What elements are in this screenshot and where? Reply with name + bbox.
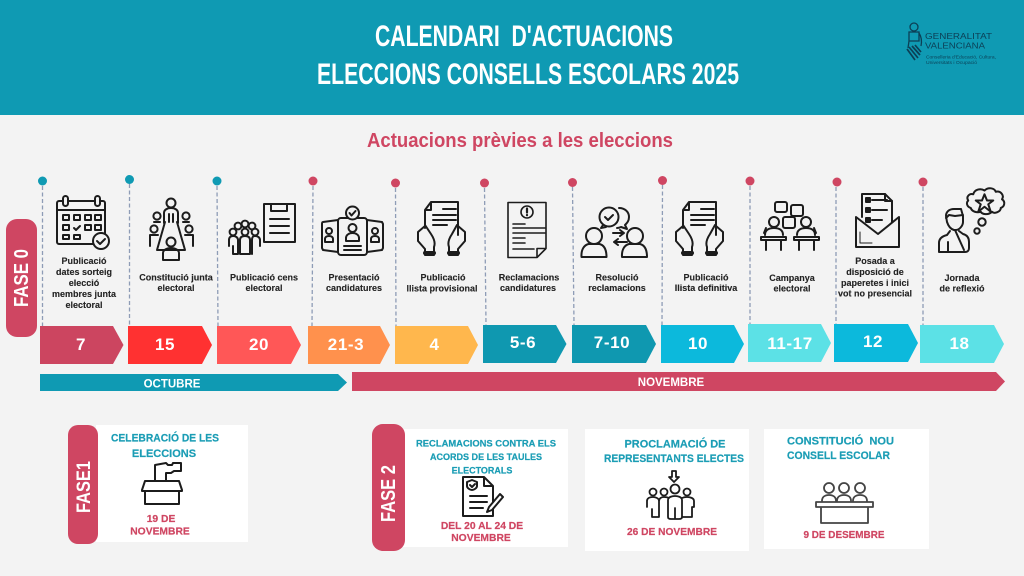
tab: FASE 0: FASE 0 xyxy=(11,249,33,307)
date arrow: 4: 4 xyxy=(429,335,440,354)
panel: Constitució nou consell xyxy=(764,429,929,549)
label: Resolució: reclamacions xyxy=(588,283,646,293)
label: Resolució: Resolució xyxy=(595,272,639,282)
panel: Proclamació: PROCLAMACIÓ DE xyxy=(624,438,726,450)
date arrow: 10 xyxy=(661,325,744,363)
panel: FASE 2 xyxy=(372,424,568,551)
panel: FASE 2: RECLAMACIONS CONTRA ELS xyxy=(416,438,556,450)
date arrow: 20 xyxy=(217,326,301,364)
label: Publicació cens: Publicació cens xyxy=(230,272,298,282)
date arrow: 5-6 xyxy=(483,325,566,363)
date arrow: 7-10: 7-10 xyxy=(594,333,630,352)
label: Jornada: Jornada xyxy=(944,273,980,283)
icon: candidate cards xyxy=(322,206,383,255)
panel: FASE 1: NOVEMBRE xyxy=(130,526,190,538)
date arrow: 12: 12 xyxy=(863,332,883,351)
icon: final list held in hands xyxy=(676,202,723,255)
title: CALENDARI D'ACTUACIONS xyxy=(375,20,673,53)
month bar: OCTUBRE xyxy=(40,374,347,391)
tab: FASE 0 xyxy=(6,219,37,337)
icon: provisional list held in hands xyxy=(418,202,465,255)
panel: FASE 2: ELECTORALS xyxy=(452,466,512,476)
label: llista definitiva: Publicació xyxy=(683,272,729,282)
label: Publicació dates: elecció xyxy=(69,278,100,288)
label: Publicació dates: electoral xyxy=(65,300,103,310)
icon: claims document with alert xyxy=(508,202,546,258)
icon: council table xyxy=(816,483,873,523)
label: Publicació dates: Publicació xyxy=(61,256,107,266)
icon: calendar xyxy=(57,196,109,249)
icon: electoral board meeting xyxy=(150,198,193,260)
panel: FASE 2: DEL 20 AL 24 DE xyxy=(441,521,523,532)
month bar: NOVEMBRE xyxy=(352,372,1005,391)
label: Constitució junta: electoral xyxy=(157,283,195,293)
date arrow: 11-17 xyxy=(748,324,831,362)
title: ELECCIONS CONSELLS ESCOLARS 2025 xyxy=(317,58,739,91)
title xyxy=(317,20,739,91)
logo: Generalitat Valenciana xyxy=(907,23,996,65)
label: llista provisional: llista provisional xyxy=(406,284,478,294)
date arrow: 11-17: 11-17 xyxy=(767,334,813,353)
label: Publicació dates: membres junta xyxy=(52,289,117,299)
date arrow: 15 xyxy=(128,326,212,364)
icon: electoral campaign xyxy=(761,202,819,250)
label: Posada a disposició: vot no presencial xyxy=(838,288,912,298)
logo: Generalitat Valenciana: Universitats i Ocupació xyxy=(926,60,978,65)
logo: Generalitat Valenciana: Conselleria d'Educació, Cultura, xyxy=(926,54,996,60)
date arrow: 5-6: 5-6 xyxy=(510,333,536,352)
label: llista provisional: Publicació xyxy=(420,272,466,282)
month bar: OCTUBRE: OCTUBRE xyxy=(144,378,201,390)
logo: Generalitat Valenciana: VALENCIANA xyxy=(925,40,985,50)
label: Campanya: Campanya xyxy=(769,273,816,283)
label: Campanya: electoral xyxy=(773,284,811,294)
label: Jornada: de reflexió xyxy=(939,284,985,294)
panel: Constitució nou consell: CONSTITUCIÓ NOU xyxy=(787,434,894,448)
panel: Constitució nou consell: CONSELL ESCOLAR xyxy=(787,450,890,462)
heading: prior actions: Actuacions prèvies a les eleccions xyxy=(367,130,673,152)
label: Constitució junta: Constitució junta xyxy=(139,272,214,282)
icon: people with arrow xyxy=(647,471,694,519)
label: Publicació dates: dates sorteig xyxy=(56,267,112,277)
icon: ballot papers in envelope xyxy=(856,194,899,247)
label: Reclamacions: Reclamacions xyxy=(499,272,559,282)
label: Reclamacions: candidatures xyxy=(500,283,556,293)
month bar: NOVEMBRE: NOVEMBRE xyxy=(638,377,705,389)
date arrow: 12 xyxy=(834,324,918,362)
date arrow: 18: 18 xyxy=(949,334,970,353)
date arrow: 7-10 xyxy=(572,325,656,363)
label: Publicació cens: electoral xyxy=(245,283,283,293)
panel: FASE 2: FASE 2 xyxy=(378,465,400,522)
date arrow: 4 xyxy=(395,326,478,364)
panel: FASE 1 xyxy=(68,425,248,544)
icon: census list and people xyxy=(229,204,295,254)
date arrow: 21-3 xyxy=(308,326,390,364)
panel: FASE 2: NOVEMBRE xyxy=(451,533,511,544)
date arrow: 15: 15 xyxy=(155,335,175,354)
icon: document with pen xyxy=(463,477,503,516)
panel: FASE 1: ELECCIONS xyxy=(132,448,196,460)
header band xyxy=(0,0,1024,115)
label: Posada a disposició: disposició de xyxy=(846,267,904,277)
label: Posada a disposició: paperetes i inici xyxy=(841,278,909,288)
date arrow: 18 xyxy=(920,325,1004,363)
timeline pins xyxy=(38,175,928,326)
panel: FASE 1: 19 DE xyxy=(147,514,175,525)
date arrow: 21-3: 21-3 xyxy=(328,335,364,354)
panel: Constitució nou consell: 9 DE DESEMBRE xyxy=(804,529,884,541)
label: Posada a disposició: Posada a xyxy=(855,256,896,266)
date arrow: 7: 7 xyxy=(76,335,86,354)
label: Presentació: candidatures xyxy=(326,283,382,293)
icon: resolution of claims xyxy=(581,208,647,257)
date arrow: 20: 20 xyxy=(249,335,269,354)
panel: FASE 1: FASE1 xyxy=(74,461,95,513)
label: Presentació: Presentació xyxy=(328,272,380,282)
icon: ballot box xyxy=(142,463,182,504)
date arrow: 10: 10 xyxy=(688,334,708,353)
icon: day of reflection thinker xyxy=(939,188,1004,252)
date arrow: 7 xyxy=(40,326,124,364)
panel: FASE 2: ACORDS DE LES TAULES xyxy=(430,452,542,463)
logo: Generalitat Valenciana: GENERALITAT xyxy=(925,31,993,41)
panel: Proclamació: REPRESENTANTS ELECTES xyxy=(604,453,744,465)
panel: Proclamació: 26 DE NOVEMBRE xyxy=(627,526,717,538)
label: llista definitiva: llista definitiva xyxy=(675,283,738,293)
panel: Proclamació xyxy=(585,429,749,551)
panel: FASE 1: CELEBRACIÓ DE LES xyxy=(111,432,219,444)
